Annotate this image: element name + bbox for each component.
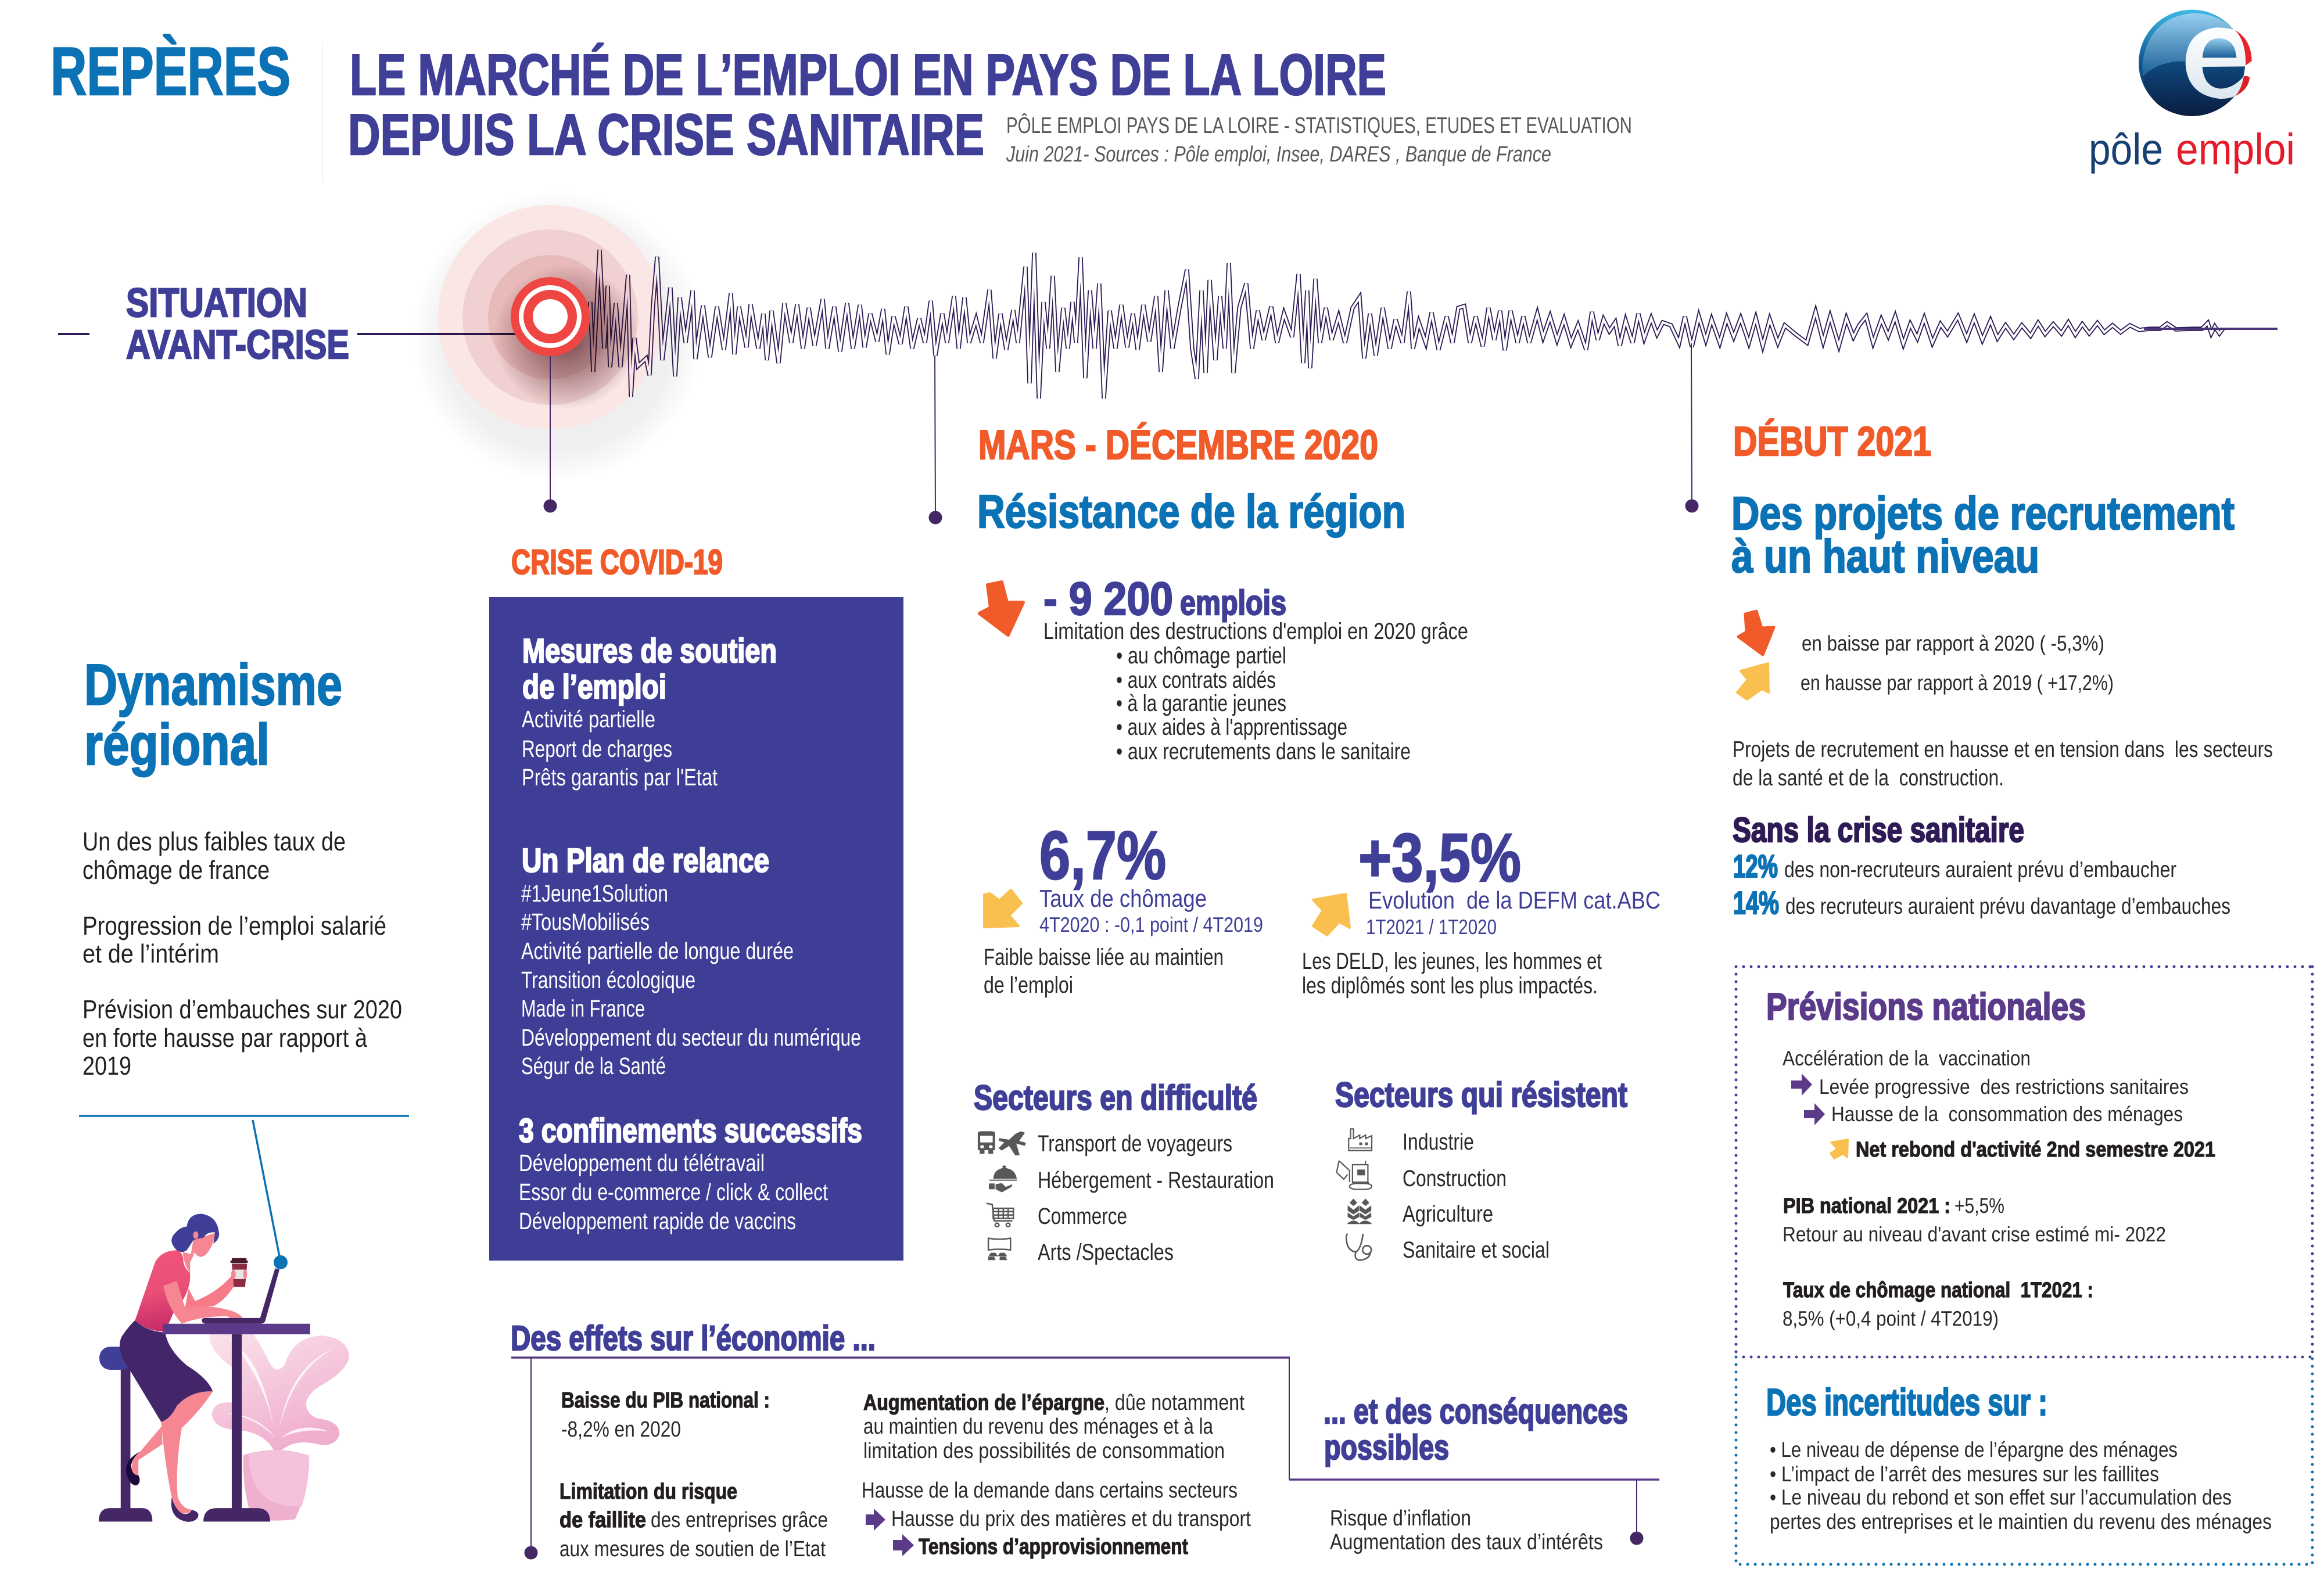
block: sans la crise sanitaire: des non-recruteurs auraient prévu d’embaucher — [1784, 857, 2176, 882]
list: secteurs qui résistent: Sanitaire et social — [1403, 1237, 1550, 1263]
subtitle and sources: PÔLE EMPLOI PAYS DE LA LOIRE - STATISTIQUES, ETUDES ET EVALUATION — [1006, 113, 1632, 138]
list: secteurs qui résistent: Construction — [1403, 1166, 1507, 1191]
block: projets de recrutement: en baisse par rapport à 2020 ( -5,3%) — [1802, 631, 2104, 655]
heading: crise covid-19: CRISE COVID-19 — [511, 543, 723, 581]
panel: prévisions nationales: Net rebond d'activité 2nd semestre 2021 — [1856, 1137, 2215, 1161]
block: sans la crise sanitaire: Sans la crise sanitaire — [1733, 810, 2024, 849]
heading: mars-décembre 2020: MARS - DÉCEMBRE 2020 — [978, 422, 1378, 468]
panel: prévisions nationales: Hausse de la consommation des ménages — [1831, 1102, 2183, 1126]
section: effets sur l'économie: aux mesures de soutien de l’Etat — [560, 1537, 826, 1561]
stat: évolution DEFM: les diplômés sont les plus impactés. — [1302, 973, 1598, 999]
icon: yellow up arrow — [1737, 663, 1769, 699]
panel: prévisions nationales: PIB national 2021 : — [1783, 1194, 1950, 1218]
text: mesures de soutien: Prêts garantis par l'Etat — [522, 764, 718, 791]
section: effets sur l'économie: de faillite — [560, 1508, 646, 1532]
section: conséquences possibles: Risque d’inflation — [1330, 1506, 1471, 1531]
block: sans la crise sanitaire: 12% — [1733, 848, 1778, 884]
section: effets sur l'économie: Des effets sur l’économie ... — [511, 1319, 876, 1358]
section: effets sur l'économie: -8,2% en 2020 — [561, 1417, 681, 1442]
stat: taux de chômage — [984, 817, 1263, 998]
text: plan de relance: #TousMobilisés — [521, 909, 650, 935]
panel: des incertitudes: • L’impact de l’arrêt des mesures sur les faillites — [1770, 1462, 2159, 1486]
text: dynamisme points: en forte hausse par rapport à — [83, 1023, 368, 1053]
text: confinements: Développement rapide de vaccins — [519, 1208, 796, 1234]
panel: prévisions nationales: Prévisions nationales — [1766, 985, 2086, 1028]
stat: évolution DEFM: +3,5% — [1358, 820, 1521, 896]
section: effets sur l'économie — [511, 1319, 1290, 1561]
block: sans la crise sanitaire — [1733, 810, 2230, 921]
text: plan de relance: Ségur de la Santé — [521, 1053, 666, 1079]
text: dynamisme points: 2019 — [83, 1051, 131, 1080]
panel: dotted frame — [1736, 967, 2312, 1564]
heading: début 2021: à un haut niveau — [1731, 530, 2039, 582]
icon: yellow up-right arrow — [1313, 894, 1350, 935]
text: dynamisme points: Progression de l’emploi salarié — [83, 911, 386, 940]
text: mesures de soutien — [522, 632, 777, 791]
section: effets sur l'économie: Baisse du PIB national : — [561, 1388, 770, 1413]
stat: emplois: - 9 200 — [1043, 573, 1173, 624]
text: plan de relance: Développement du secteur du numérique — [521, 1024, 861, 1051]
stat: taux de chômage: 4T2020 : -0,1 point / 4T2019 — [1039, 913, 1263, 936]
panel: prévisions nationales — [1766, 985, 2215, 1330]
heading: situation avant-crise: AVANT-CRISE — [126, 322, 349, 367]
panel: prévisions nationales: +5,5% — [1954, 1194, 2004, 1218]
section: conséquences possibles: Augmentation des taux d’intérêts — [1330, 1530, 1603, 1555]
icon: target — [511, 277, 590, 356]
heading: situation avant-crise — [126, 280, 349, 367]
timeline marker: début 2021 — [1685, 343, 1699, 512]
list: secteurs en difficulté: Hébergement - Restauration — [1038, 1168, 1274, 1193]
text: confinements: Développement du télétravail — [519, 1150, 765, 1176]
icon: yellow down-left arrow — [984, 890, 1021, 927]
logo: pôle emploi: pôle — [2089, 125, 2163, 174]
stat: évolution DEFM: Les DELD, les jeunes, les hommes et — [1302, 949, 1602, 974]
connector: consequences bracket — [1289, 1480, 1659, 1534]
text: dynamisme points: Un des plus faibles taux de — [83, 827, 346, 856]
text: mesures de soutien: Mesures de soutien — [522, 632, 777, 670]
heading: mars-décembre 2020 — [977, 422, 1405, 537]
text: plan de relance: Transition écologique — [521, 967, 695, 993]
epicentre glow — [413, 191, 703, 481]
list: secteurs en difficulté: Commerce — [1038, 1204, 1127, 1229]
timeline marker: mars-décembre — [928, 356, 942, 524]
logo: pôle emploi — [2089, 10, 2295, 174]
section: effets sur l'économie: des entreprises grâce — [651, 1508, 828, 1532]
section: effets sur l'économie: Hausse de la demande dans certains secteurs — [862, 1478, 1238, 1503]
list: secteurs en difficulté: Arts /Spectacles — [1038, 1240, 1174, 1265]
stat: emplois: • à la garantie jeunes — [1116, 691, 1286, 716]
list: secteurs en difficulté: Transport de voyageurs — [1038, 1131, 1232, 1157]
title: LE MARCHÉ DE L’EMPLOI EN PAYS DE LA LOIRE — [350, 42, 1386, 107]
section: effets sur l'économie: Limitation du risque — [560, 1480, 737, 1504]
heading: début 2021 — [1731, 419, 2235, 582]
title — [348, 42, 1386, 167]
stat: emplois: Limitation des destructions d'emploi en 2020 grâce — [1043, 619, 1468, 644]
section: effets sur l'économie: Hausse du prix des matières et du transport — [891, 1507, 1251, 1531]
heading: début 2021: DÉBUT 2021 — [1733, 419, 1931, 465]
section: effets sur l'économie: au maintien du revenu des ménages et à la — [863, 1415, 1214, 1439]
text: plan de relance: Un Plan de relance — [522, 842, 769, 879]
heading: début 2021: Des projets de recrutement — [1731, 487, 2235, 539]
text: confinements: 3 confinements successifs — [519, 1112, 862, 1150]
icon: purple arrow — [866, 1509, 885, 1531]
heading: situation avant-crise: SITUATION — [126, 280, 307, 325]
section: conséquences possibles: possibles — [1324, 1428, 1449, 1467]
illustration: woman at laptop — [99, 1120, 349, 1522]
panel: des incertitudes: Des incertitudes sur : — [1766, 1381, 2047, 1423]
heading: dynamisme régional: Dynamisme — [84, 652, 342, 717]
seismic wave chart — [588, 250, 2278, 399]
section: effets sur l'économie: Tensions d’approvisionnement — [919, 1535, 1188, 1559]
block: sans la crise sanitaire: des recruteurs auraient prévu davantage d’embauches — [1785, 894, 2230, 919]
text: dynamisme points: Prévision d’embauches sur 2020 — [83, 995, 402, 1024]
icon: purple arrow — [1791, 1074, 1812, 1096]
block: projets de recrutement: en hausse par rapport à 2019 ( +17,2%) — [1801, 671, 2114, 695]
heading: mars-décembre 2020: Résistance de la région — [977, 486, 1405, 537]
block: projets de recrutement — [1733, 611, 2273, 791]
stat: emplois: • au chômage partiel — [1116, 643, 1286, 669]
stat: emplois: • aux recrutements dans le sanitaire — [1116, 739, 1411, 764]
stat: taux de chômage: de l’emploi — [984, 972, 1073, 998]
stat: taux de chômage: 6,7% — [1039, 817, 1166, 894]
block: sans la crise sanitaire: 14% — [1733, 885, 1779, 921]
text: confinements — [519, 1112, 862, 1234]
stat: taux de chômage: Taux de chômage — [1039, 885, 1207, 912]
stat: emplois: emplois — [1180, 583, 1286, 622]
block: projets de recrutement: de la santé et de la construction. — [1733, 766, 2004, 791]
panel: prévisions nationales: Taux de chômage national 1T2021 : — [1783, 1278, 2093, 1302]
icon: purple arrow — [893, 1534, 914, 1556]
list: secteurs qui résistent: Industrie — [1403, 1129, 1474, 1155]
stat: taux de chômage: Faible baisse liée au maintien — [984, 945, 1224, 970]
subtitle and sources: Juin 2021- Sources : Pôle emploi, Insee, DARES , Banque de France — [1006, 142, 1551, 167]
stat: emplois — [980, 573, 1468, 764]
panel: des incertitudes: • Le niveau de dépense de l’épargne des ménages — [1770, 1438, 2178, 1462]
stat: emplois: • aux aides à l'apprentissage — [1116, 715, 1347, 740]
heading: dynamisme régional — [84, 652, 342, 777]
text: confinements: Essor du e-commerce / click & collect — [519, 1179, 828, 1205]
text: plan de relance: Activité partielle de longue durée — [521, 938, 794, 964]
panel: des incertitudes — [1766, 1381, 2272, 1534]
section: effets sur l'économie: limitation des possibilités de consommation — [863, 1439, 1225, 1463]
text: mesures de soutien: de l’emploi — [522, 668, 666, 706]
list: secteurs qui résistent — [1335, 1075, 1627, 1263]
stat: évolution DEFM: Evolution de la DEFM cat.ABC — [1368, 886, 1660, 914]
text: plan de relance — [521, 842, 861, 1079]
panel: prévisions nationales: 8,5% (+0,4 point / 4T2019) — [1783, 1306, 1999, 1330]
panel: crise covid — [489, 597, 903, 1261]
list: secteurs en difficulté: Secteurs en difficulté — [974, 1078, 1257, 1117]
text: mesures de soutien: Activité partielle — [522, 706, 655, 733]
title: DEPUIS LA CRISE SANITAIRE — [348, 102, 984, 167]
icon: orange down arrow — [980, 582, 1023, 635]
section: effets sur l'économie: , dûe notamment — [1104, 1391, 1245, 1415]
list: secteurs en difficulté — [974, 1078, 1274, 1265]
icons: difficulty sectors — [978, 1131, 1026, 1260]
icons: resisting sectors — [1337, 1129, 1372, 1260]
list: secteurs qui résistent: Agriculture — [1403, 1201, 1493, 1227]
text: dynamisme points — [83, 827, 402, 1080]
text: plan de relance: Made in France — [521, 995, 645, 1022]
list: secteurs qui résistent: Secteurs qui résistent — [1335, 1075, 1627, 1114]
icon: purple arrow — [1804, 1103, 1825, 1125]
text: mesures de soutien: Report de charges — [522, 735, 672, 762]
timeline marker: crise covid — [544, 356, 557, 512]
stat: évolution DEFM — [1302, 820, 1660, 999]
stat: évolution DEFM: 1T2021 / 1T2020 — [1366, 915, 1497, 939]
panel: des incertitudes: • Le niveau du rebond et son effet sur l’accumulation des — [1770, 1485, 2232, 1509]
panel: prévisions nationales: Accélération de la vaccination — [1783, 1046, 2031, 1070]
subtitle and sources — [1006, 113, 1632, 167]
panel: prévisions nationales: Levée progressive des restrictions sanitaires — [1819, 1075, 2189, 1098]
panel: dynamisme régional — [83, 652, 402, 1080]
section: conséquences possibles — [1289, 1392, 1659, 1555]
logo: pôle emploi: emploi — [2176, 125, 2295, 174]
text: dynamisme points: et de l’intérim — [83, 939, 219, 968]
section: conséquences possibles: ... et des conséquences — [1324, 1392, 1628, 1431]
heading: dynamisme régional: régional — [84, 712, 270, 777]
stat: emplois: • aux contrats aidés — [1116, 667, 1276, 693]
connector: effects bracket — [511, 1358, 1290, 1548]
text: dynamisme points: chômage de france — [83, 855, 270, 885]
section: effets sur l'économie: Augmentation de l’épargne — [863, 1391, 1104, 1415]
icon: orange down arrow — [1738, 611, 1774, 655]
badge: REPÈRES: REPÈRES — [51, 33, 290, 109]
text: plan de relance: #1Jeune1Solution — [521, 880, 668, 907]
panel: prévisions nationales: Retour au niveau d'avant crise estimé mi- 2022 — [1783, 1222, 2166, 1246]
icon: yellow arrow — [1830, 1139, 1848, 1159]
